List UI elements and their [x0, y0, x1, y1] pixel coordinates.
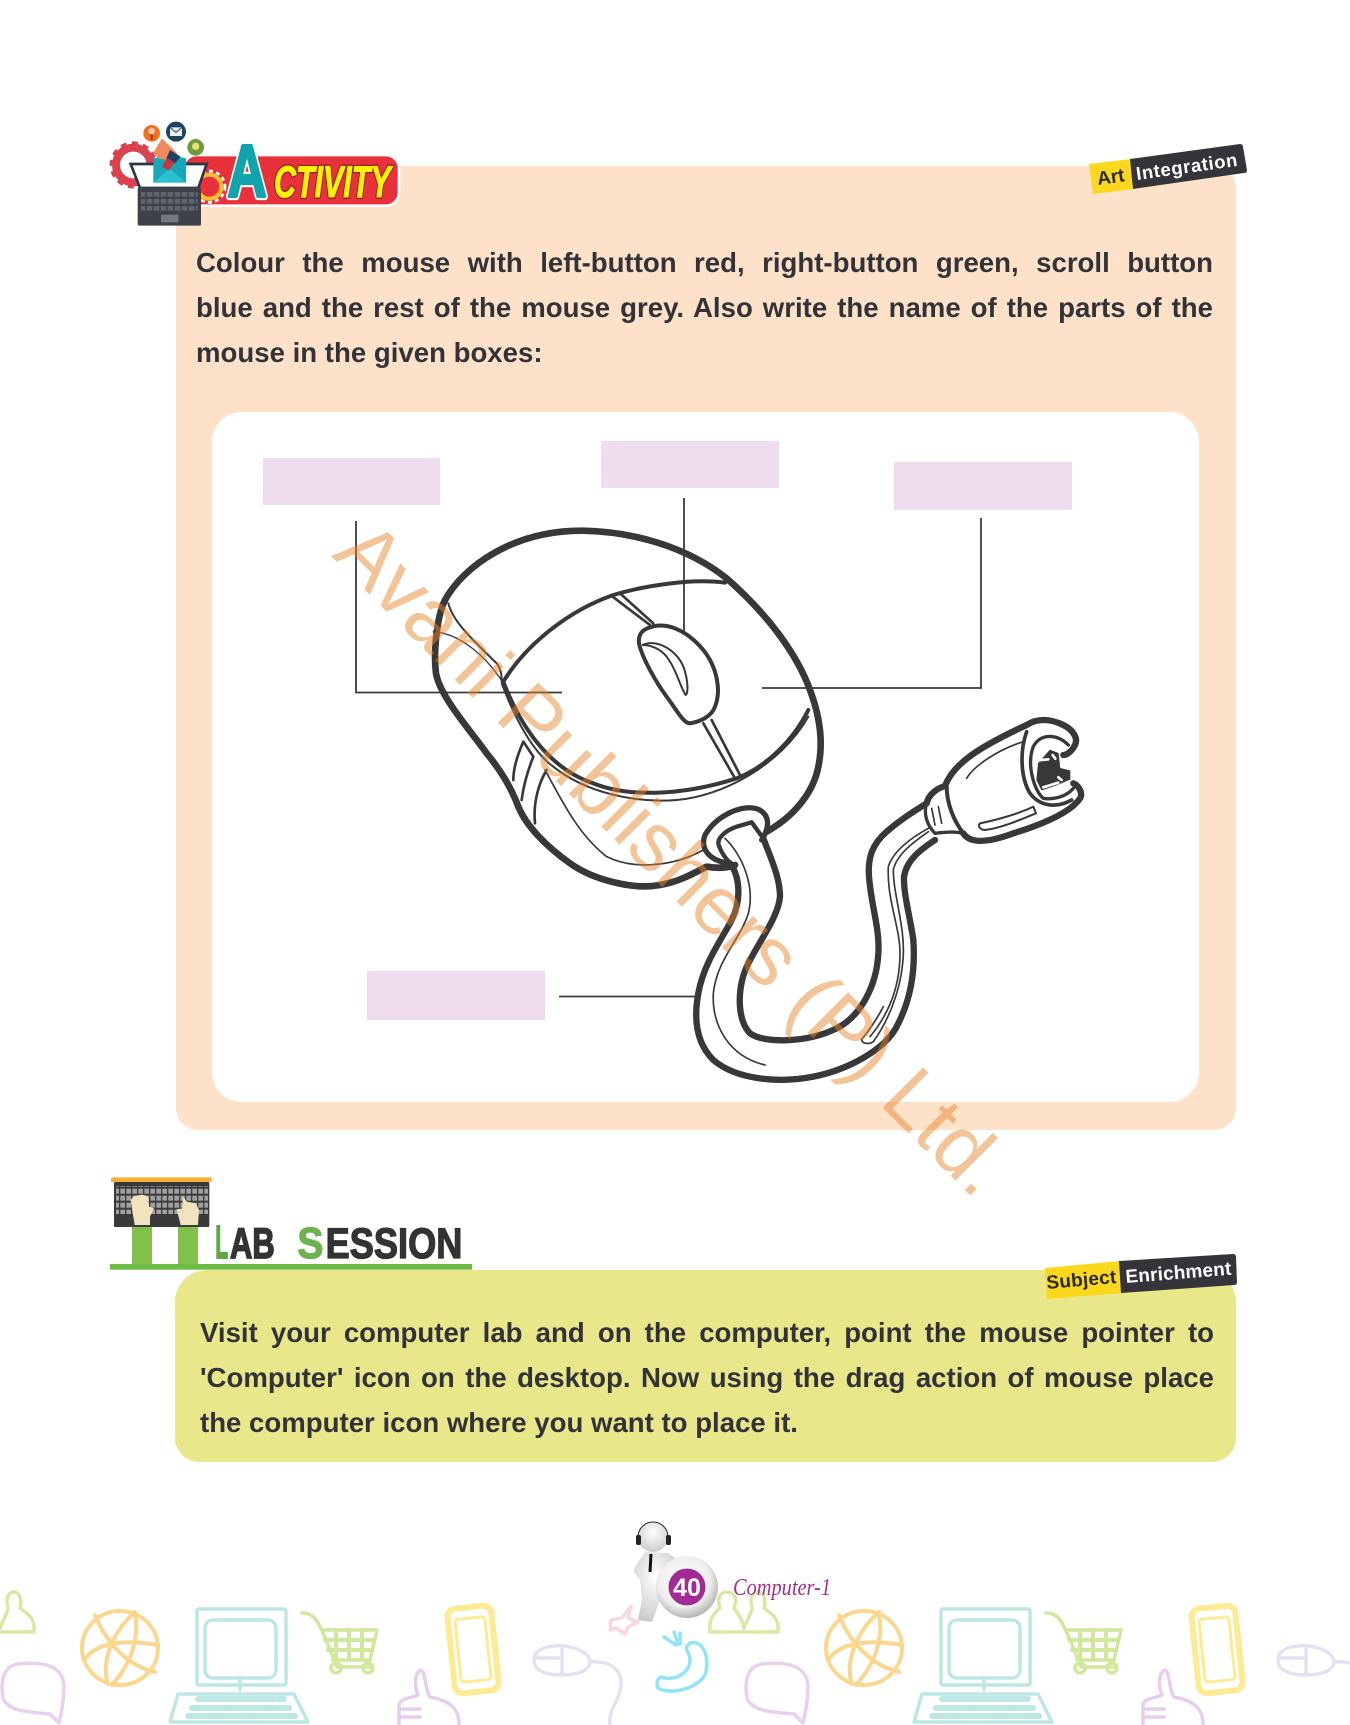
doodle set: second repeat: [710, 1592, 1350, 1724]
label box: scroll button: [601, 441, 779, 488]
doodle: globe: [82, 1611, 158, 1685]
banner: red activity ribbon: [183, 155, 399, 206]
icon: large red gear: [111, 143, 155, 187]
lab session instructions text: the computer icon where you want to place it.: [200, 1407, 798, 1438]
activity instructions text: Colour the mouse with left-button red, right-button green, scroll button: [196, 247, 1213, 278]
doodle: shopping cart: [302, 1613, 377, 1673]
mouse drawing: cable and plug: [696, 720, 1081, 1080]
doodle: globe: [826, 1611, 902, 1685]
heading letter S: S: [297, 1219, 323, 1268]
panel: white drawing area: [212, 412, 1199, 1102]
doodle: people: [710, 1592, 778, 1632]
tag: art integration: Integration: [1135, 149, 1239, 184]
baseline bar: [110, 1264, 472, 1270]
figure: headset man: [634, 1522, 675, 1622]
activity instructions text: blue and the rest of the mouse grey. Also write the name of the parts of the: [196, 292, 1213, 323]
doodle: people: [0, 1592, 34, 1632]
doodle: speech bubble: [746, 1663, 808, 1723]
tag: subject enrichment: Subject: [1046, 1267, 1118, 1294]
heading word CTIVITY: [274, 158, 394, 207]
doodle: smartphone: [447, 1605, 499, 1694]
doodle: mouse: [1278, 1646, 1350, 1724]
lab session instructions text: [200, 1317, 1214, 1438]
lab session instructions text: Visit your computer lab and on the computer, point the mouse pointer to: [200, 1317, 1214, 1348]
doodle: star: [610, 1606, 638, 1634]
book title: Computer-1: [733, 1575, 831, 1601]
heading word CTIVITY: CTIVITY: [274, 158, 394, 207]
icon: orange magnifier circle: [143, 125, 160, 142]
lab session heading: [110, 1177, 472, 1270]
footer doodle strip: [0, 1592, 1350, 1724]
doodle: shopping cart: [1046, 1613, 1121, 1673]
doodle: smartphone: [1191, 1605, 1243, 1694]
heading letters AB: AB: [230, 1220, 275, 1268]
icon: navy mail circle: [166, 122, 186, 142]
badge: purple circle: [668, 1568, 706, 1606]
doodle: mouse: [534, 1646, 621, 1724]
label box: cable: [367, 971, 545, 1020]
icon: laptop with envelope and megaphone: [131, 138, 207, 226]
tag: subject enrichment: [1045, 1254, 1237, 1299]
activity heading badge: [111, 122, 399, 226]
doodle: thumbs up: [1143, 1670, 1203, 1724]
heading letter A: A: [227, 130, 267, 213]
tag: art integration: Art: [1096, 165, 1127, 190]
doodle: speech bubble: [2, 1663, 64, 1723]
page number: 40: [673, 1574, 701, 1602]
panel: lab session background: [175, 1270, 1236, 1462]
doodle: blue telephone: [657, 1632, 707, 1691]
mouse drawing: body: [433, 531, 821, 886]
watermark: Avani Publishers (P) Ltd.: [318, 503, 1029, 1214]
lab session instructions text: 'Computer' icon on the desktop. Now using the drag action of mouse place: [200, 1362, 1214, 1393]
label box: left button: [263, 458, 440, 505]
leader lines to label boxes: [356, 498, 981, 996]
doodle: laptop: [170, 1609, 308, 1722]
doodle set: first repeat: [0, 1592, 621, 1724]
heading letter A: A: [227, 130, 267, 213]
label box: right button: [894, 462, 1072, 510]
badge: page number disc: [656, 1556, 718, 1618]
activity instructions text: [196, 247, 1213, 368]
heading word CTIVITY: CTIVITY: [274, 158, 394, 207]
page number mascot: [634, 1522, 831, 1622]
icon: keyboard with typing hands: [111, 1177, 212, 1265]
tag: art integration: [1089, 144, 1247, 194]
tag: subject enrichment: Enrichment: [1125, 1259, 1233, 1288]
lab session heading: L: [215, 1216, 228, 1268]
activity instructions text: mouse in the given boxes:: [196, 337, 543, 368]
heading letters ESSION: ESSION: [326, 1220, 462, 1268]
icon: green bulb circle: [187, 139, 204, 156]
doodle: laptop: [914, 1609, 1052, 1722]
panel: activity background: [176, 166, 1236, 1130]
doodle: thumbs up: [399, 1670, 459, 1724]
icon: small yellow gear: [194, 171, 225, 202]
